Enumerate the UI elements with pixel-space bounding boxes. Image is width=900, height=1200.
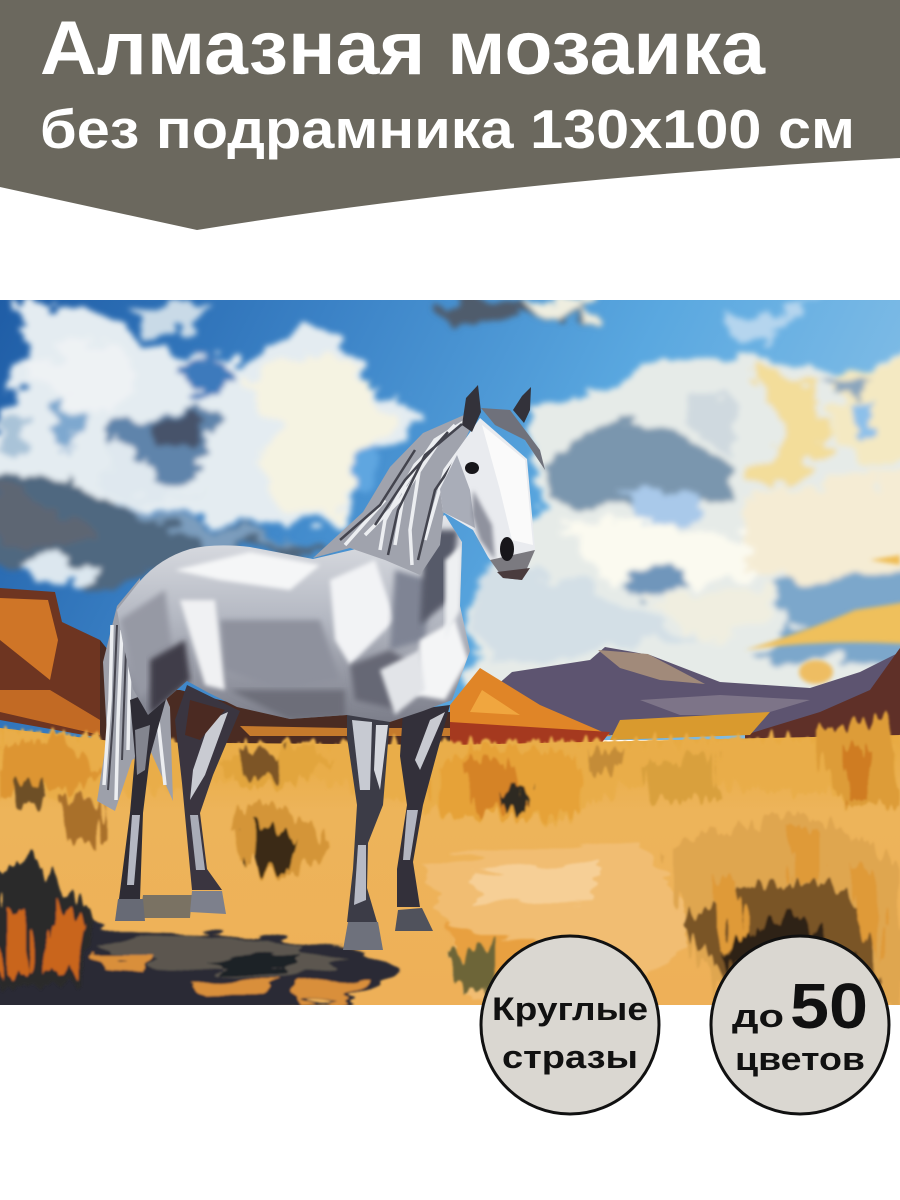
- badge: up to 50 colours: [711, 936, 889, 1114]
- tail: [97, 578, 173, 811]
- badge: up to 50 colours: цветов: [735, 1041, 865, 1077]
- mountains: [0, 588, 900, 750]
- near front leg: [343, 703, 390, 950]
- ground shadow under hind legs: [140, 895, 192, 918]
- badge: round rhinestones: [481, 936, 659, 1114]
- clouds left: [0, 300, 420, 590]
- far front leg: [395, 705, 450, 931]
- subtitle: без подрамника 130х100 см: [40, 98, 855, 160]
- head: [440, 385, 545, 580]
- left foreground bush: [0, 855, 95, 985]
- dry grass and bushes: [0, 720, 900, 1005]
- badge: round rhinestones: стразы: [502, 1039, 638, 1075]
- clouds right: [430, 298, 900, 700]
- horse: [97, 385, 545, 950]
- foreground shadow: [0, 918, 402, 1005]
- sky: [0, 300, 900, 740]
- near hind leg: [115, 697, 166, 921]
- forelock: [481, 408, 545, 470]
- far hind leg: [175, 685, 240, 914]
- title: Алмазная мозаика: [40, 6, 766, 91]
- badge: up to 50 colours: до: [732, 998, 784, 1034]
- neck and mane: [313, 415, 470, 574]
- body: [117, 515, 470, 722]
- badge: up to 50 colours: 50: [790, 970, 868, 1042]
- painting: horse in desert: [0, 298, 900, 1020]
- sun-lit cloud streaks: [745, 555, 900, 684]
- right ear: [513, 387, 531, 423]
- desert ground: [0, 728, 900, 1005]
- left ear: [462, 385, 481, 432]
- badge: round rhinestones: Круглые: [492, 991, 648, 1027]
- header banner: [0, 0, 900, 230]
